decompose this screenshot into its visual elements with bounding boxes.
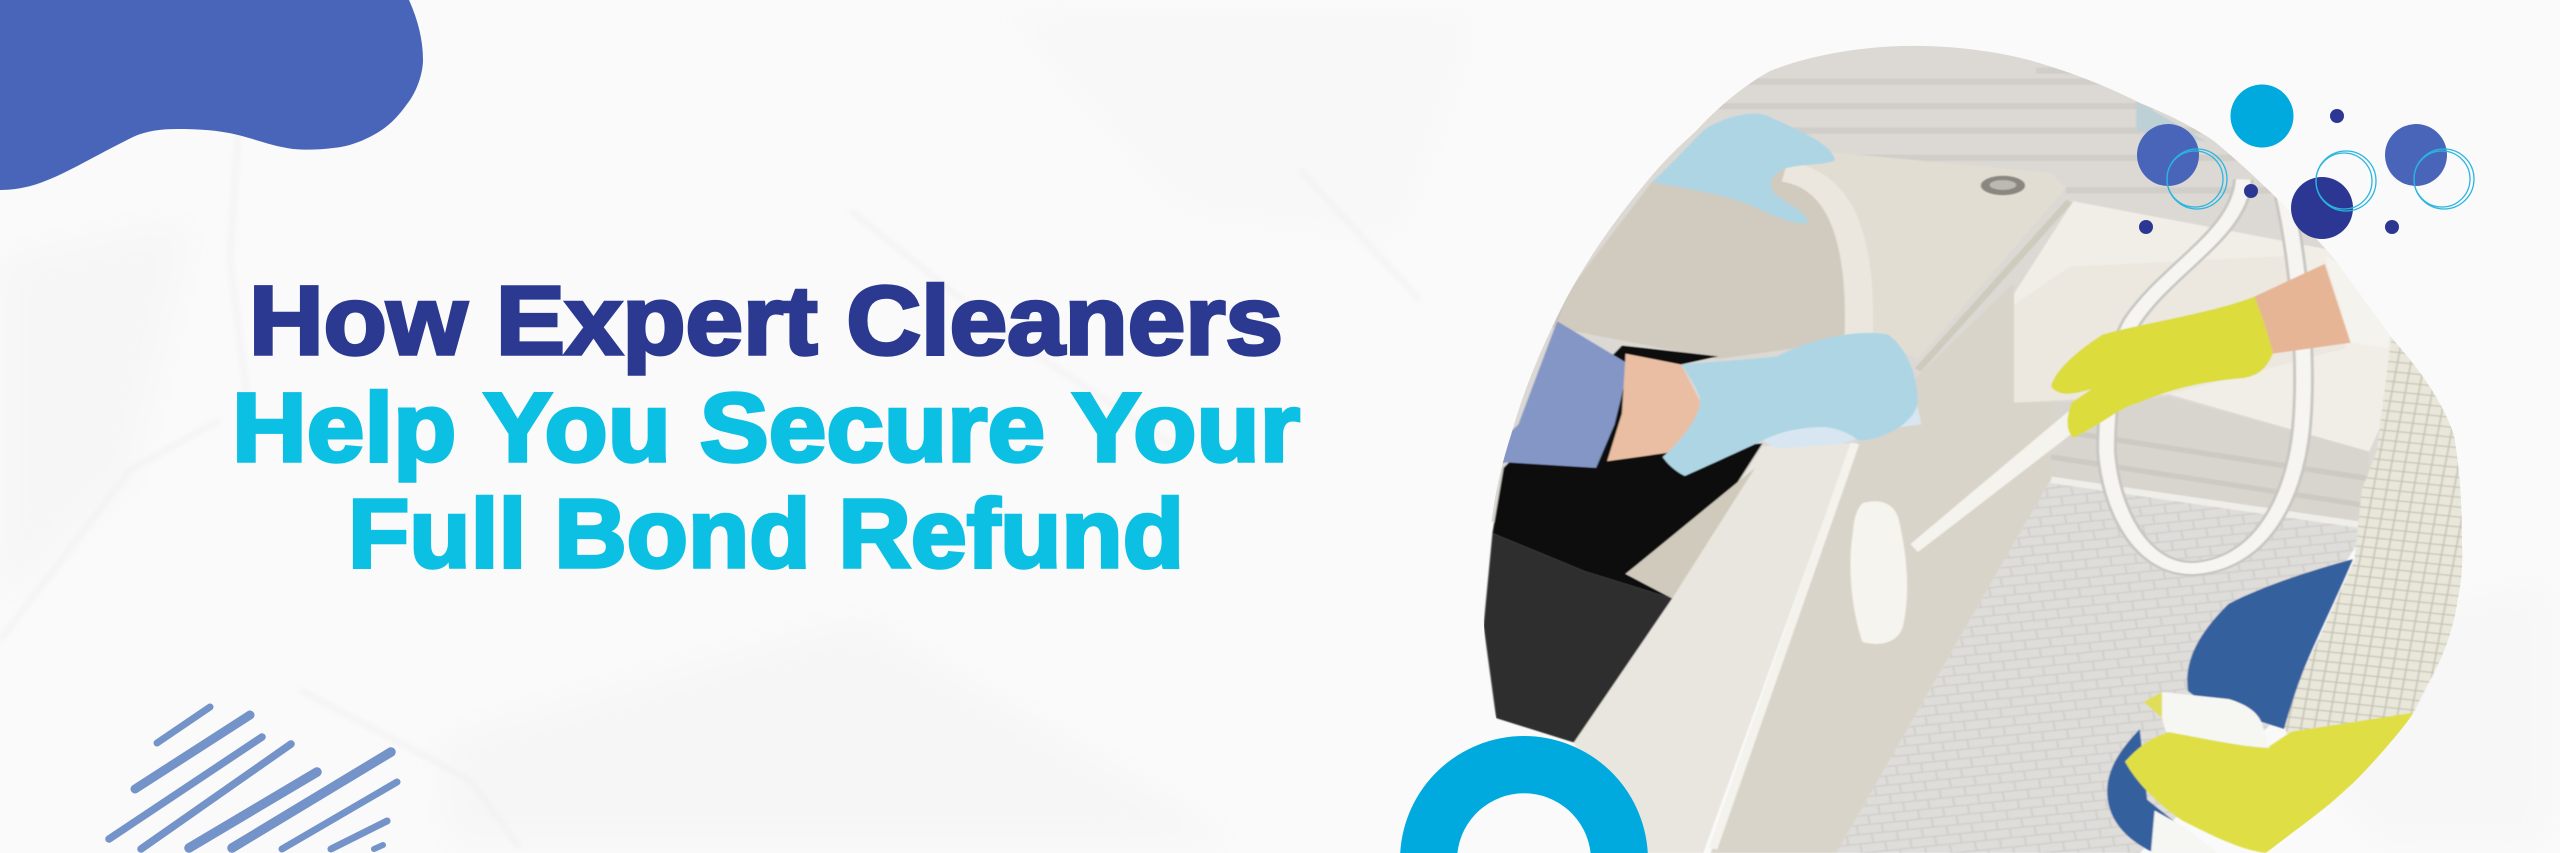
cyan ring: [1400, 736, 1648, 853]
right forearm: [2254, 264, 2351, 354]
checked garment: [2284, 339, 2462, 734]
title line 3: Full Bond Refund: [348, 479, 1184, 588]
blue circle right: [2385, 124, 2447, 186]
shelf: [2014, 201, 2391, 452]
jeans: [2107, 559, 2353, 853]
shower hose: [2107, 180, 2303, 569]
cyan circle: [2230, 84, 2294, 148]
tub curved rim: [1785, 171, 1859, 337]
title line 2: Help You Secure Your: [232, 373, 1300, 482]
circles cluster top-right: [2137, 84, 2474, 239]
outline rings: [2167, 149, 2474, 211]
tub side panel: [1711, 283, 2051, 853]
blue shirt sleeve: [1502, 311, 1626, 469]
title: [232, 266, 1300, 588]
navy circle: [2291, 177, 2353, 239]
blue circle left: [2137, 124, 2199, 186]
bathroom wall: [1492, 46, 2392, 524]
drain cap: [1981, 176, 2025, 195]
forearm: [1607, 354, 1703, 461]
decorative blob top-left: [0, 0, 423, 190]
tub front rim: [1574, 443, 1851, 853]
blue glove on rim: [1652, 114, 1835, 223]
title line 1: How Expert Cleaners: [249, 266, 1283, 375]
white cuff: [2378, 320, 2390, 336]
blue glove on cloth: [1663, 333, 1918, 476]
tub interior: [1552, 169, 1845, 359]
cleaning cloth: [1763, 406, 1922, 448]
diagonal hatch strokes bottom-left: [109, 707, 397, 849]
yellow glove with brush: [2051, 296, 2273, 438]
cleaning photo in organic blob: [1474, 33, 2510, 853]
tub deck edge: [1918, 201, 2070, 370]
small navy dots: [2139, 109, 2399, 234]
shower floor: [1836, 479, 2369, 853]
spray bottle: [2143, 692, 2269, 853]
lower wall: [2051, 432, 2367, 508]
sponge brush: [1850, 411, 2072, 644]
tub deck: [1833, 154, 1918, 162]
yellow glove with bottle: [2125, 713, 2414, 853]
black trousers: [1484, 345, 1763, 743]
